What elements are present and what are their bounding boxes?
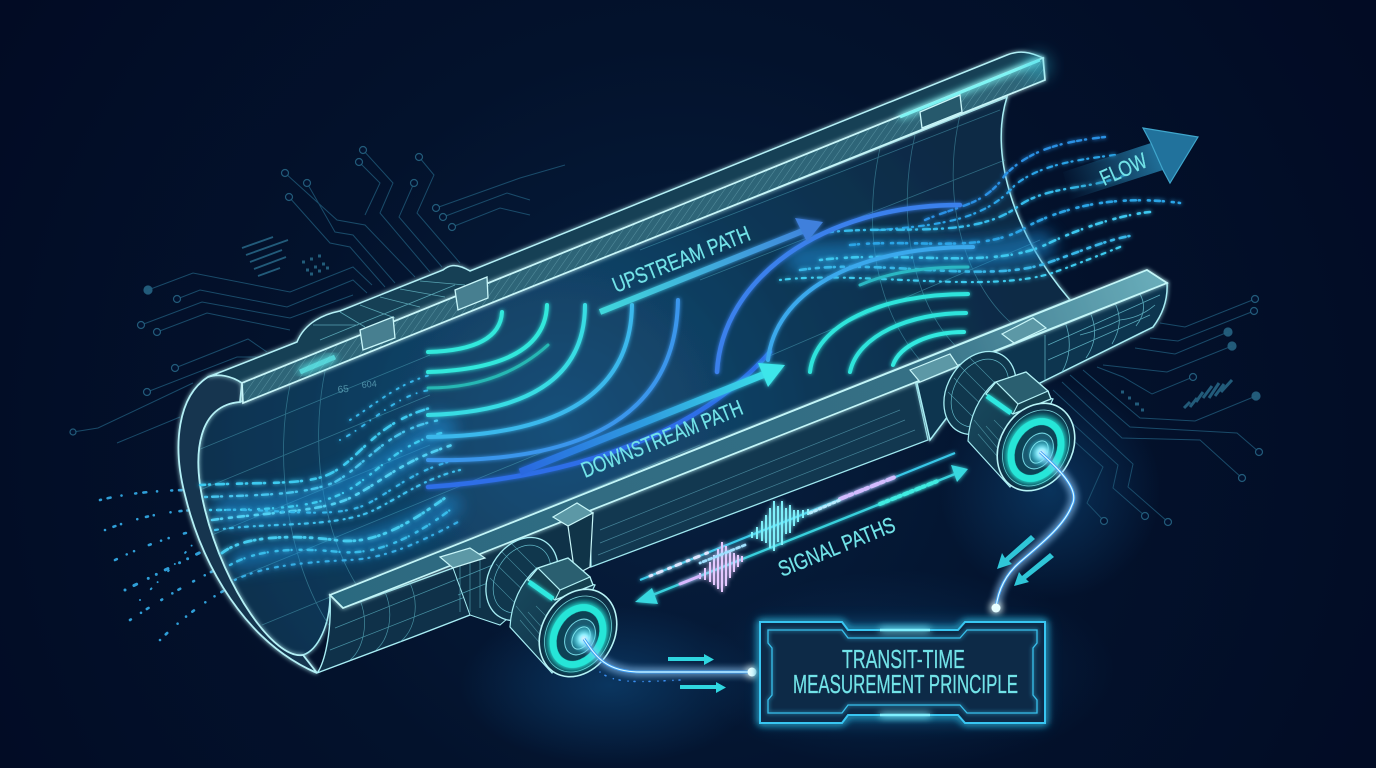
left end ring face (179, 375, 317, 673)
lower wall top face (330, 270, 1167, 608)
pipe interior (198, 97, 1070, 655)
flow label: FLOW (1096, 148, 1151, 191)
downstream path label: DOWNSTREAM PATH (578, 395, 746, 483)
flow particles right (780, 137, 1180, 282)
lower blocks (440, 318, 1046, 575)
box title line 2: MEASUREMENT PRINCIPLE (793, 671, 1018, 699)
inner small notes: 65 (337, 384, 350, 396)
end glow top (1025, 53, 1051, 79)
lower middle body (590, 380, 928, 567)
inner small notes: 604 (361, 378, 377, 390)
lower body highlights (598, 410, 915, 555)
lower signal line with arrowheads (635, 465, 968, 604)
upper wall bright rim (900, 60, 1040, 117)
upstream path arrow (600, 218, 823, 312)
upper collar mesh (313, 281, 465, 340)
particles: outflow left (100, 490, 225, 640)
sound waves left (428, 300, 770, 487)
pipe (179, 52, 1167, 673)
left collar grid lines (456, 556, 500, 612)
flow particles in pipe, left (200, 375, 460, 580)
flow arrow (1063, 128, 1198, 200)
lower right mesh (1045, 294, 1160, 380)
upper wall top face (208, 52, 1043, 383)
signal paths (635, 453, 968, 604)
transit-time measurement box (760, 622, 1047, 724)
box panel (760, 622, 1045, 723)
circuit nodes, tick marks and mini bar chart (70, 146, 1262, 526)
waveform bursts (700, 501, 808, 592)
right sensor (929, 338, 1090, 505)
left sensor (471, 524, 632, 691)
blue mist behind streams (230, 245, 1040, 560)
box title line 1: TRANSIT-TIME (842, 646, 965, 674)
collar mesh behind left sensor (453, 517, 575, 625)
interior mesh lines (198, 110, 1040, 640)
left cable arrows (668, 654, 726, 693)
upstream path label: UPSTREAM PATH (609, 221, 754, 298)
dotted signal highlights (650, 477, 940, 584)
bright collar highlight (300, 357, 335, 372)
signal paths label: SIGNAL PATHS (775, 512, 899, 582)
lower hull mesh (330, 580, 470, 660)
upper signal line (640, 453, 955, 580)
ambient glows (460, 380, 1160, 768)
downstream path arrow (520, 363, 785, 472)
upper collar blocks (360, 95, 962, 350)
box glow (760, 622, 1047, 724)
lower right hull (917, 283, 1167, 440)
box inner frame (768, 630, 1037, 713)
circuit traces (73, 150, 1259, 522)
lower left outer hull (317, 568, 490, 673)
upper wall front face (242, 58, 1045, 403)
right cable (992, 452, 1074, 612)
sound waves right (717, 205, 973, 372)
left cable (584, 639, 756, 676)
right cable arrows (997, 535, 1054, 586)
box bright ticks (880, 630, 930, 715)
cable sparkle left (600, 672, 680, 682)
inner small notes (337, 378, 377, 396)
